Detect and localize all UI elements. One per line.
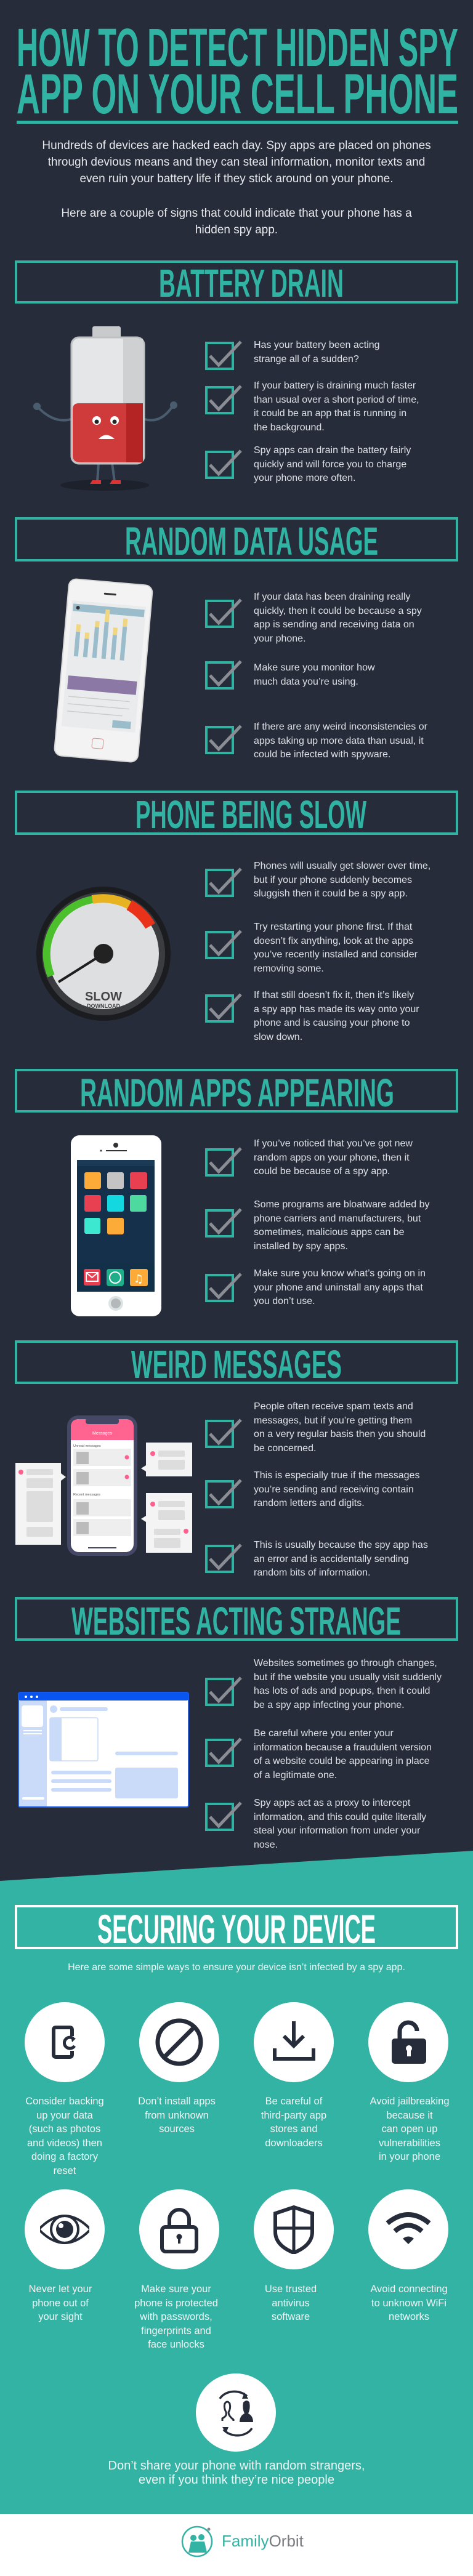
item: weird 2 bbox=[205, 1470, 419, 1508]
tip text 9: Don’t share your phone with random strangers, bbox=[108, 2459, 365, 2473]
icon: open padlock bbox=[368, 2002, 448, 2082]
tip text 7: software bbox=[272, 2311, 310, 2322]
item: apps 1 bbox=[205, 1138, 413, 1177]
text: you’re sending and receiving contain bbox=[254, 1484, 414, 1495]
text: random bits of information. bbox=[254, 1568, 370, 1578]
text: Phones will usually get slower over time, bbox=[254, 861, 431, 871]
text: nose. bbox=[254, 1840, 278, 1849]
text: Make sure you know what’s going on in bbox=[254, 1268, 426, 1279]
text: your phone and uninstall any apps that bbox=[254, 1282, 423, 1293]
intro text 2 bbox=[61, 207, 412, 236]
icon: wifi bbox=[368, 2189, 448, 2269]
illustration: phone with apps: ♫ bbox=[134, 1273, 144, 1286]
text: Has your battery been acting bbox=[254, 340, 380, 350]
tip text 1: doing a factory bbox=[31, 2151, 98, 2162]
intro text 2: hidden spy app. bbox=[195, 223, 278, 236]
tip text 6: phone is protected bbox=[134, 2298, 218, 2309]
tip text 2 bbox=[138, 2096, 216, 2135]
item: weird 3 bbox=[205, 1540, 428, 1578]
text: quickly, then it could be because a spy bbox=[254, 606, 422, 616]
illustration: messages phone: Recent messages bbox=[73, 1493, 100, 1497]
illustration: phone with apps bbox=[71, 1135, 161, 1316]
text: it could be an app that is running in bbox=[254, 408, 406, 419]
tip text 8: to unknown WiFi bbox=[371, 2298, 447, 2309]
text: apps taking up more data than usual, it bbox=[254, 735, 424, 746]
text: but if the website you usually visit suddenly bbox=[254, 1672, 442, 1682]
item: data 3 bbox=[205, 722, 427, 760]
tip text 1 bbox=[25, 2096, 104, 2176]
text: you’ve recently installed and consider bbox=[254, 949, 418, 960]
intro text bbox=[42, 139, 431, 185]
tip text 6 bbox=[134, 2284, 218, 2350]
item: data 1 bbox=[205, 592, 422, 644]
icon: swap people bbox=[196, 2373, 276, 2452]
text: on a very regular basis then you should bbox=[254, 1429, 426, 1439]
tip text 7 bbox=[265, 2284, 317, 2322]
icon: block bbox=[139, 2002, 219, 2082]
text: information because a fraudulent version bbox=[254, 1742, 432, 1752]
tip text 9: even if you think they’re nice people bbox=[139, 2473, 334, 2487]
tip text 4: Avoid jailbreaking bbox=[370, 2096, 450, 2107]
text: Spy apps can drain the battery fairly bbox=[254, 445, 411, 456]
item: data 2 bbox=[205, 660, 375, 690]
text: phone and is causing your phone to bbox=[254, 1018, 410, 1028]
tip text 3: third-party app bbox=[261, 2109, 326, 2120]
item: battery 1 bbox=[205, 340, 380, 370]
text: could be because of a spy app. bbox=[254, 1166, 390, 1177]
text: quickly and will force you to charge bbox=[254, 459, 406, 469]
illustration: slow speed gauge bbox=[36, 887, 171, 1021]
illustration: messages phone bbox=[15, 1415, 192, 1556]
illustration: phone with data chart bbox=[54, 579, 153, 762]
icon: shield bbox=[254, 2189, 334, 2269]
text: random apps on your phone, then it bbox=[254, 1153, 410, 1162]
tip text 5 bbox=[29, 2284, 92, 2322]
intro text: through devious means and they can steal information, monitor texts and bbox=[48, 156, 425, 169]
icon: padlock bbox=[139, 2189, 219, 2269]
tip text 6: face unlocks bbox=[148, 2339, 204, 2350]
text: you don’t use. bbox=[254, 1296, 315, 1306]
tip text 5: phone out of bbox=[32, 2298, 89, 2309]
tip text 4: because it bbox=[386, 2109, 433, 2120]
text: of a legitimate one. bbox=[254, 1769, 337, 1781]
text: steal your information from under your bbox=[254, 1825, 420, 1836]
illustration: slow speed gauge: DOWNLOAD bbox=[87, 1003, 120, 1009]
text: your phone. bbox=[254, 633, 306, 644]
text: slow down. bbox=[254, 1032, 302, 1042]
tip text 3: Be careful of bbox=[265, 2096, 322, 2107]
text: but if your phone suddenly becomes bbox=[254, 874, 412, 885]
subtitle: Here are some simple ways to ensure your device isn’t infected by a spy app. bbox=[68, 1962, 405, 1973]
text: If that still doesn’t fix it, then it’s likely bbox=[254, 990, 414, 1000]
icon: eye bbox=[25, 2189, 105, 2269]
tip text 3: stores and bbox=[270, 2123, 318, 2135]
item: slow 3 bbox=[205, 990, 419, 1042]
text: than usual over a short period of time, bbox=[254, 394, 419, 405]
item: web 2 bbox=[205, 1728, 432, 1781]
text: your phone more often. bbox=[254, 473, 355, 483]
tip text 6: fingerprints and bbox=[141, 2325, 211, 2336]
heading: battery drain bbox=[15, 260, 458, 304]
text: This is usually because the spy app has bbox=[254, 1540, 428, 1550]
item: weird 1 bbox=[205, 1401, 426, 1453]
item: battery 2 bbox=[205, 380, 419, 432]
text: be a spy app infecting your phone. bbox=[254, 1699, 405, 1710]
tip text 9 bbox=[108, 2459, 365, 2487]
tip text 2: from unknown bbox=[145, 2109, 209, 2120]
text: has lots of ads and popups, then it could bbox=[254, 1686, 430, 1696]
text: random letters and digits. bbox=[254, 1498, 365, 1508]
tip text 7: Use trusted bbox=[265, 2284, 317, 2295]
item: slow 1 bbox=[205, 861, 431, 899]
text: Try restarting your phone first. If that bbox=[254, 922, 412, 932]
text: an error and is accidentally sending bbox=[254, 1554, 409, 1564]
tip text 2: sources bbox=[159, 2123, 195, 2135]
intro text 2: Here are a couple of signs that could indicate that your phone has a bbox=[61, 207, 412, 220]
text: Be careful where you enter your bbox=[254, 1728, 394, 1739]
text: could be infected with spyware. bbox=[254, 749, 390, 760]
text: the background. bbox=[254, 422, 325, 432]
illustration: battery bbox=[33, 326, 177, 491]
text: Websites sometimes go through changes, bbox=[254, 1658, 437, 1668]
text: removing some. bbox=[254, 963, 324, 974]
item: web 3 bbox=[205, 1798, 426, 1849]
tip text 8: networks bbox=[389, 2311, 429, 2322]
text: If your battery is draining much faster bbox=[254, 380, 416, 391]
illustration: messages phone: Unread messages bbox=[73, 1444, 101, 1448]
text: sluggish then it could be a spy app. bbox=[254, 888, 408, 899]
text: This is especially true if the messages bbox=[254, 1470, 419, 1481]
item: battery 3 bbox=[205, 445, 411, 483]
tip text 3 bbox=[261, 2096, 326, 2149]
text: be concerned. bbox=[254, 1443, 316, 1453]
text: doesn’t fix anything, look at the apps bbox=[254, 936, 413, 946]
text: messages, but if you’re getting them bbox=[254, 1415, 412, 1426]
text: Some programs are bloatware added by bbox=[254, 1199, 430, 1210]
text: of a website could be appearing in place bbox=[254, 1756, 430, 1766]
text: much data you’re using. bbox=[254, 676, 358, 687]
text: sometimes, malicious apps can be bbox=[254, 1227, 405, 1238]
tip text 1: Consider backing bbox=[25, 2096, 104, 2107]
icon: download bbox=[254, 2002, 334, 2082]
tip text 4: vulnerabilities bbox=[379, 2138, 440, 2149]
tip text 5: Never let your bbox=[29, 2284, 92, 2295]
text: Spy apps act as a proxy to intercept bbox=[254, 1798, 410, 1808]
icon: phone backup bbox=[25, 2002, 105, 2082]
text: information, and this could quite literally bbox=[254, 1811, 426, 1822]
tip text 5: your sight bbox=[38, 2311, 83, 2322]
tip text 1: and videos) then bbox=[27, 2138, 102, 2149]
text: strange all of a sudden? bbox=[254, 353, 359, 364]
tip text 6: with passwords, bbox=[140, 2311, 212, 2322]
text: People often receive spam texts and bbox=[254, 1401, 413, 1412]
tip text 6: Make sure your bbox=[141, 2284, 211, 2295]
tip text 4 bbox=[370, 2096, 450, 2162]
heading: phone being slow bbox=[15, 791, 458, 835]
tip text 8: Avoid connecting bbox=[370, 2284, 448, 2295]
illustration: messages phone: Messages bbox=[92, 1431, 112, 1436]
tip text 7: antivirus bbox=[272, 2298, 310, 2309]
logo: Family Orbit bbox=[181, 2526, 304, 2558]
tip text 4: in your phone bbox=[379, 2151, 440, 2162]
logo: Family Orbit: FamilyOrbit bbox=[222, 2532, 304, 2550]
illustration: browser window bbox=[18, 1692, 189, 1808]
tip text 8 bbox=[370, 2284, 448, 2322]
text: phone carriers and manufacturers, but bbox=[254, 1213, 421, 1224]
item: apps 2 bbox=[205, 1199, 430, 1251]
tip text 1: reset bbox=[54, 2165, 76, 2176]
text: If you’ve noticed that you’ve got new bbox=[254, 1138, 413, 1149]
tip text 3: downloaders bbox=[265, 2138, 323, 2149]
panel: securing your device background bbox=[0, 1851, 473, 2576]
tip text 1: up your data bbox=[36, 2109, 93, 2120]
text: a spy app has made its way onto your bbox=[254, 1004, 419, 1015]
text: Make sure you monitor how bbox=[254, 662, 375, 673]
text: app is sending and receiving data on bbox=[254, 619, 414, 630]
tip text 2: Don’t install apps bbox=[138, 2096, 216, 2107]
illustration: slow speed gauge: SLOW bbox=[85, 990, 122, 1004]
text: If your data has been draining really bbox=[254, 592, 410, 602]
intro text: Hundreds of devices are hacked each day. Spy apps are placed on phones bbox=[42, 139, 431, 152]
text: installed by spy apps. bbox=[254, 1241, 348, 1251]
tip text 1: (such as photos bbox=[29, 2123, 100, 2135]
item: apps 3 bbox=[205, 1268, 426, 1306]
title bbox=[17, 18, 458, 126]
item: slow 2 bbox=[205, 922, 418, 974]
item: web 1 bbox=[205, 1658, 442, 1710]
intro text: even ruin your battery life if they stick around on your phone. bbox=[79, 172, 394, 185]
tip text 4: can open up bbox=[382, 2123, 437, 2135]
text: If there are any weird inconsistencies or bbox=[254, 722, 427, 732]
